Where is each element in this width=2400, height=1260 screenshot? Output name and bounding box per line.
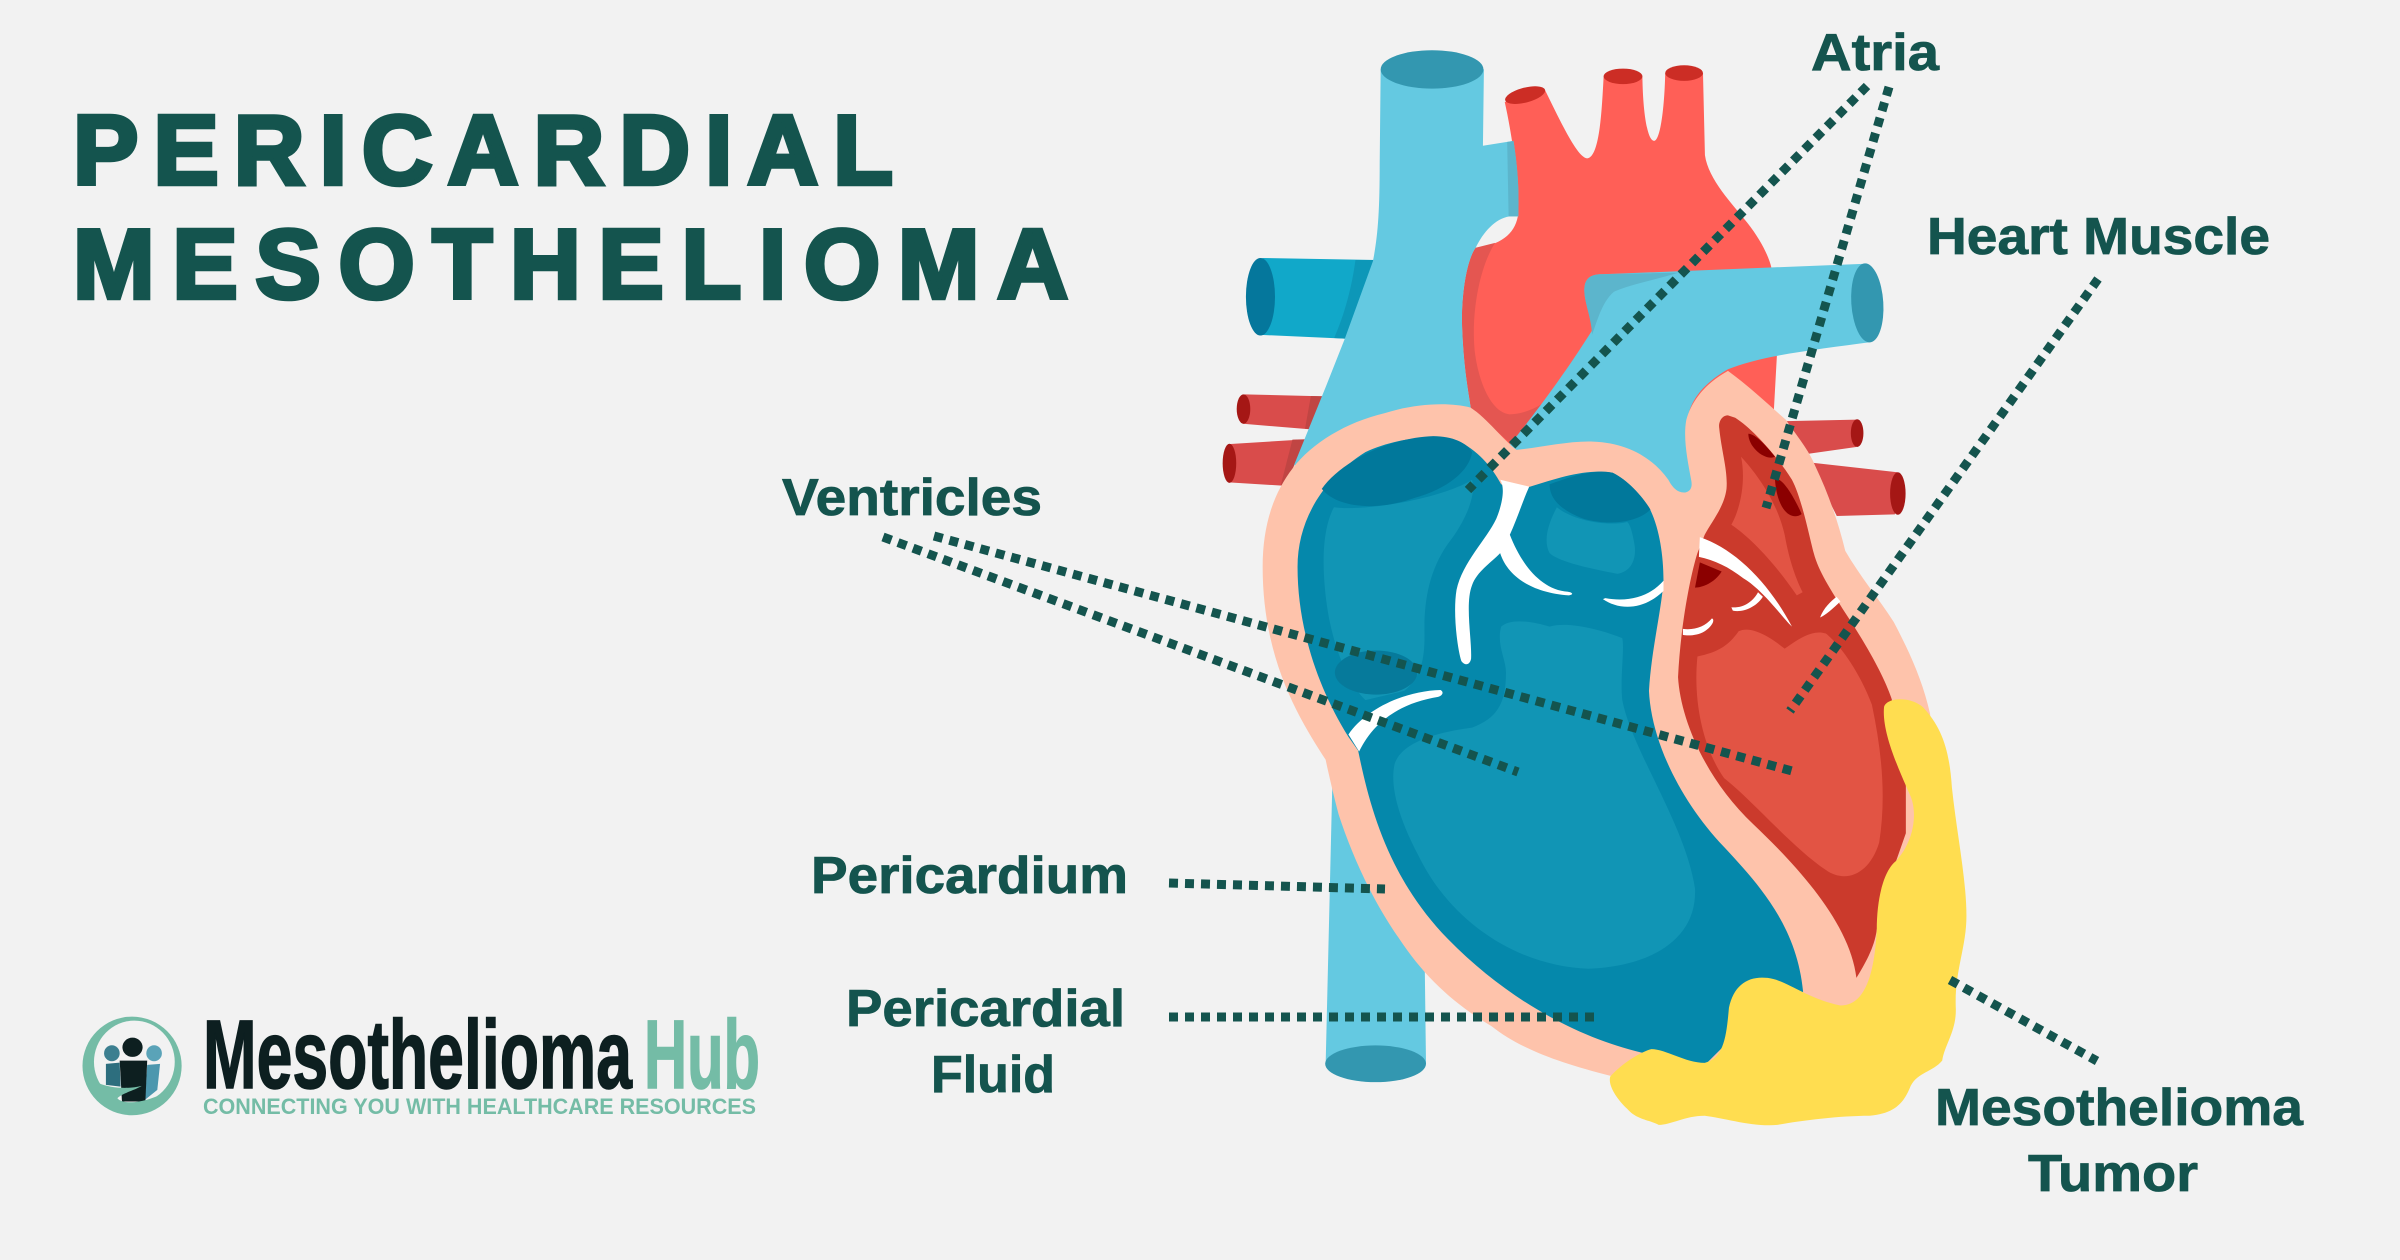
pericardium [1263,371,1942,1084]
leader line: ventricles right [934,536,1792,771]
label: Pericardium: Pericardium [811,847,1128,905]
leader line: tumor [1950,980,2097,1061]
white vessels red side [1699,537,1792,627]
leader line: heart muscle [1790,279,2098,711]
mesothelioma tumor [1610,699,1966,1125]
leader line: pericardial fluid [1169,1012,1594,1022]
label: Atria: Atria [1811,24,1940,82]
red chamber [1678,415,1906,978]
label: Mesothelioma Tumor: Tumor [2028,1145,2198,1203]
leader line: ventricles left [883,537,1518,772]
dark red valves [1748,434,1775,458]
dark blue valves [1322,436,1472,506]
logo: Mesothelioma Hub [82,1000,760,1119]
logo wordmark: Mesothelioma [203,1000,633,1109]
title [73,95,1068,319]
label: Ventricles: Ventricles [782,469,1042,527]
leader line: pericardium [1169,883,1385,889]
title: PERICARDIAL [73,95,893,205]
back vessels [1223,258,1906,516]
heart illustration [1223,50,1966,1125]
light red walls [1696,630,1883,876]
label: Mesothelioma Tumor: Mesothelioma [1935,1079,2304,1137]
leader line: atria to left atrium [1468,86,1867,490]
white vessels blue side [1455,480,1572,664]
pulmonary artery [1500,263,1886,502]
logo wordmark Hub: Hub [644,1000,760,1109]
logo tagline: CONNECTING YOU WITH HEALTHCARE RESOURCES [203,1094,756,1119]
inferior vena cava [1325,778,1426,1082]
logo icon [82,1017,182,1115]
label: Mesothelioma Tumor [1935,1079,2304,1203]
label: Heart Muscle: Heart Muscle [1927,208,2270,266]
blue chamber [1298,437,1803,1065]
leader line: atria to right atrium [1766,87,1889,508]
light blue-chamber wall [1324,480,1473,700]
label: Pericardial Fluid: Fluid [931,1046,1055,1104]
superior vena cava [1294,50,1519,465]
pericardium and chambers [1263,371,1966,1125]
label: Pericardial Fluid: Pericardial [846,980,1125,1038]
label: Pericardial Fluid [846,980,1125,1104]
aorta [1462,65,1777,453]
title: MESOTHELIOMA [73,209,1068,319]
